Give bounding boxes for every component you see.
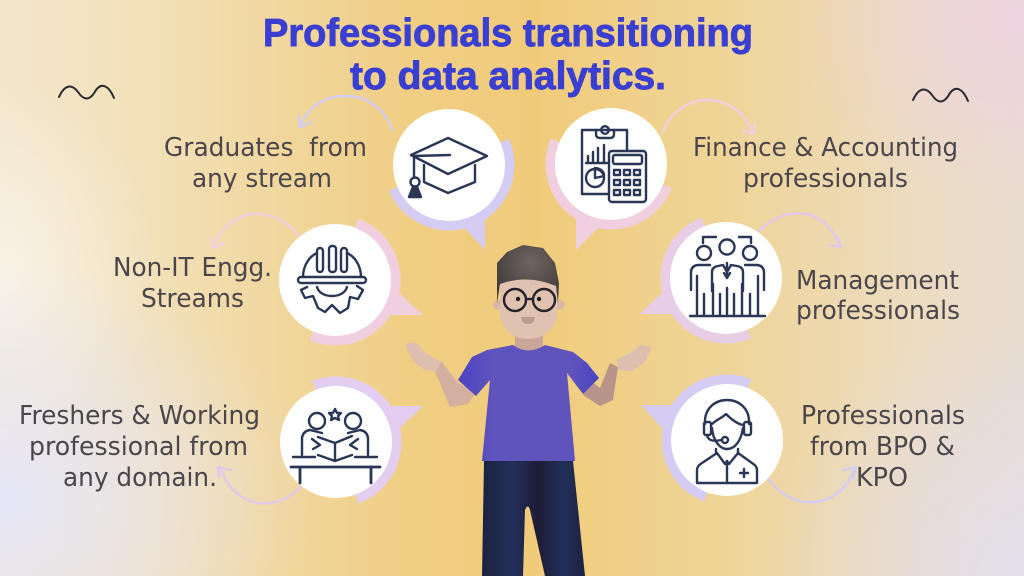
title [263,12,753,98]
arrow: management [758,213,841,247]
text: graduates: Graduates from [164,133,367,163]
bubble: freshers [258,364,423,520]
decorative squiggle left [59,86,114,99]
arrow: finance [662,100,755,134]
ears [493,300,503,310]
mouth [521,317,535,324]
text: non-IT [113,253,272,314]
hair [497,245,559,303]
shirt [458,345,599,461]
eyes [516,297,520,301]
character: man shrugging [405,245,652,576]
face [500,280,557,339]
icon: hard hat and gear [298,246,366,313]
title: Professionals transitioning [263,12,753,55]
arrow: non-IT [212,214,298,248]
hands [405,342,441,371]
arms [433,362,476,407]
neck [515,332,543,352]
arrow: BPO [768,467,856,502]
text: finance: professionals [743,164,908,194]
bubble: finance [533,86,689,250]
text: BPO: from BPO & [810,432,955,462]
text: freshers: professional from [29,432,248,462]
text: management [796,266,960,326]
text: graduates [164,133,367,194]
text: finance [693,133,958,194]
text: BPO: KPO [856,463,908,493]
text: non-IT: Streams [141,284,244,314]
text: BPO: Professionals [801,401,965,431]
text: freshers: Freshers & Working [19,401,260,431]
icon: graduation cap [409,138,487,197]
text: non-IT: Non-IT Engg. [113,253,272,283]
text: freshers: any domain. [63,463,217,493]
glasses [504,289,555,311]
bubble: graduates [370,86,528,250]
icon: call center agent [697,400,757,483]
icon: team of three [690,237,765,316]
bubble: non-IT engineering [257,202,423,358]
text: freshers [19,401,260,493]
text: BPO [801,401,965,493]
arrow: graduates [299,96,392,130]
text: graduates: any stream [192,164,332,194]
bubble: management [640,200,804,356]
pants [482,461,585,576]
icon: two people reading [291,409,380,483]
text: management: professionals [796,296,960,326]
title: to data analytics. [350,55,666,98]
text: finance: Finance & Accounting [693,133,958,163]
text: management: Management [796,266,959,296]
arrow: freshers [218,467,302,503]
bubble: BPO and KPO [641,362,805,518]
icon: clipboard and calculator [582,126,646,202]
decorative squiggle right [913,89,968,102]
